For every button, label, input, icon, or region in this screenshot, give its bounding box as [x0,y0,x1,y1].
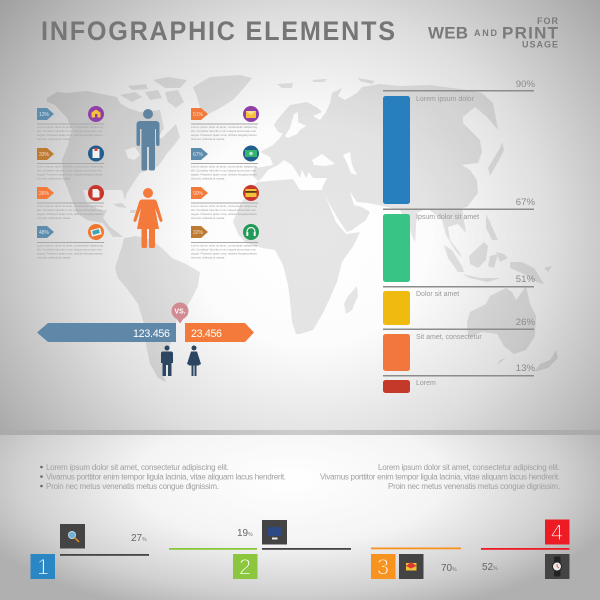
stat row: 48%: Lorem ipsum dolor sit amet, consectetur adipiscing [37,244,103,248]
stat row: 48% [37,224,104,260]
bar: 13% red: Lorem [416,380,436,387]
bar: 26% orange [383,317,535,371]
stat row: 67%: Lorem ipsum dolor sit amet, consectetur adipiscing [191,164,257,168]
icon: small man [161,346,173,376]
stat row: 33% [37,146,104,180]
stat row: 67%: elit. Curabitur lobortis mi ac magna accumsan nec [191,168,256,172]
bar: 13% red: 13% [516,363,535,374]
banner: men count [37,323,176,342]
step 2: 19% [237,528,253,539]
right-aligned text: Proin nec metus venenatis metus congue dignissim. [388,482,560,491]
step 3 [371,548,461,580]
banner: men count: 123.456 [133,328,170,340]
step 4: 4 [551,520,563,545]
subtitle: for web and print usage: WEB [428,24,468,42]
step 4 [481,520,570,579]
step 2: 2 [239,554,251,580]
bar: 51% yellow: Dolor sit amet [416,291,459,298]
right-aligned text [320,463,560,491]
stat row: 48%: elit. Curabitur lobortis mi ac magna accumsan nec [37,248,102,252]
stat row: 13% [37,106,104,141]
stat row: 33%: sit amet, vehicula at massa. [37,176,71,180]
stat row: 51%: 51% [193,112,204,118]
stat row: 13%: 13% [39,112,50,118]
stat row: 13%: augue. Praesent quam urna, ultricies feugiat pretium [37,133,104,137]
step 4: 52% [482,562,498,573]
right-aligned text: Vivamus porttitor enim tempor ligula lacinia, vitae aliquam lacus hendrerit. [320,472,560,482]
stat row: 26% [37,185,104,220]
stat row: 67% [191,146,259,180]
icon: small woman [187,346,201,376]
banner: women count: 23.456 [191,328,222,340]
vs. badge: VS. [174,308,186,316]
stat row: 26%: elit. Curabitur lobortis mi ac magna accumsan nec [37,208,102,212]
stat row: 90%: Lorem ipsum dolor sit amet, consectetur adipiscing [191,204,257,208]
stat row: 32%: augue. Praesent quam urna, ultricies feugiat pretium [191,252,258,256]
bar: 51% yellow: 51% [516,274,535,285]
stat row: 32%: 32% [193,230,204,236]
stat row: 33%: Lorem ipsum dolor sit amet, consectetur adipiscing [37,164,103,168]
bar chart [383,79,535,393]
subtitle: for web and print usage [428,16,559,50]
stat row: 90%: elit. Curabitur lobortis mi ac magna accumsan nec [191,208,256,212]
stat row: 13%: elit. Curabitur lobortis mi ac magna accumsan nec [37,129,102,133]
bullet list text: Vivamus porttitor enim tempor ligula lacinia, vitae aliquam lacus hendrerit. [46,472,286,482]
step 2 [169,520,351,580]
bullet list text: Lorem ipsum dolor sit amet, consectetur adipiscing elit. [46,463,229,472]
bullet list text [40,463,286,491]
stat row: 51%: elit. Curabitur lobortis mi ac magna accumsan nec [191,129,256,133]
background: lower panel [0,435,600,600]
stat row: 90%: 90% [193,191,204,197]
stat row: 51% [191,106,259,141]
stat row: 32%: Lorem ipsum dolor sit amet, consectetur adipiscing [191,244,257,248]
stat row: 67%: sit amet, vehicula at massa. [191,176,225,180]
icon: man [136,109,160,170]
world map [47,75,558,382]
bar: 26% orange: 26% [516,317,535,328]
stat row: 90% [191,185,259,220]
vs. badge [172,302,188,324]
bar: 67% green: Ipsum dolor sit amet [416,214,479,221]
bar: 67% green [383,197,535,282]
stat row: 90%: augue. Praesent quam urna, ultricies feugiat pretium [191,212,258,216]
banner: women count [185,323,254,342]
stat row: 48%: sit amet, vehicula at massa. [37,256,71,260]
stat row: 26%: augue. Praesent quam urna, ultricies feugiat pretium [37,212,104,216]
subtitle: for web and print usage: FOR [537,16,558,26]
bullet list text: Proin nec metus venenatis metus congue dignissim. [46,482,219,491]
stat row: 48%: 48% [39,230,50,236]
title: INFOGRAPHIC ELEMENTS [41,17,395,46]
subtitle: for web and print usage: PRINT [502,24,559,42]
stat row: 13%: sit amet, vehicula at massa. [37,137,71,141]
stat row: 26%: sit amet, vehicula at massa. [37,216,71,220]
step 1: 27% [131,533,147,544]
background: upper panel [0,0,600,435]
stat row: 32%: elit. Curabitur lobortis mi ac magna accumsan nec [191,248,256,252]
bar: 26% orange: Sit amet, consectetur [416,334,482,341]
stat row: 33%: 33% [39,152,50,158]
step 3: 3 [377,554,389,580]
stat row: 51%: augue. Praesent quam urna, ultricies feugiat pretium [191,133,258,137]
stat row: 26%: Lorem ipsum dolor sit amet, consectetur adipiscing [37,204,103,208]
stat row: 48%: augue. Praesent quam urna, ultricies feugiat pretium [37,252,104,256]
stat row: 67%: augue. Praesent quam urna, ultricies feugiat pretium [191,172,258,176]
icon: woman [134,188,162,248]
stat row: 90%: sit amet, vehicula at massa. [191,216,225,220]
stat row: 13%: Lorem ipsum dolor sit amet, consectetur adipiscing [37,125,103,129]
stat row: 32%: sit amet, vehicula at massa. [191,256,225,260]
stat row: 32% [191,224,259,260]
step 1: 1 [37,554,49,580]
subtitle: for web and print usage: USAGE [522,40,558,50]
stat row: 51%: Lorem ipsum dolor sit amet, consectetur adipiscing [191,125,257,129]
subtitle: for web and print usage: AND [474,28,498,38]
right-aligned text: Lorem ipsum dolor sit amet, consectetur adipiscing elit. [378,463,560,472]
stat row: 33%: augue. Praesent quam urna, ultricies feugiat pretium [37,172,104,176]
step 3: 70% [441,563,457,574]
step 1 [30,524,149,580]
bar: 67% green: 67% [516,197,535,208]
stat row: 26%: 26% [39,191,50,197]
bar: 13% red [383,363,535,393]
bar: 51% yellow [383,274,535,325]
bar: 90% blue: Lorem ipsum dolor [416,96,475,103]
stat row: 51%: sit amet, vehicula at massa. [191,137,225,141]
bar: 90% blue: 90% [516,79,535,90]
bar: 90% blue [383,79,535,204]
band between panels [0,430,600,435]
stat row: 67%: 67% [193,152,204,158]
stat row: 33%: elit. Curabitur lobortis mi ac magna accumsan nec [37,168,102,172]
